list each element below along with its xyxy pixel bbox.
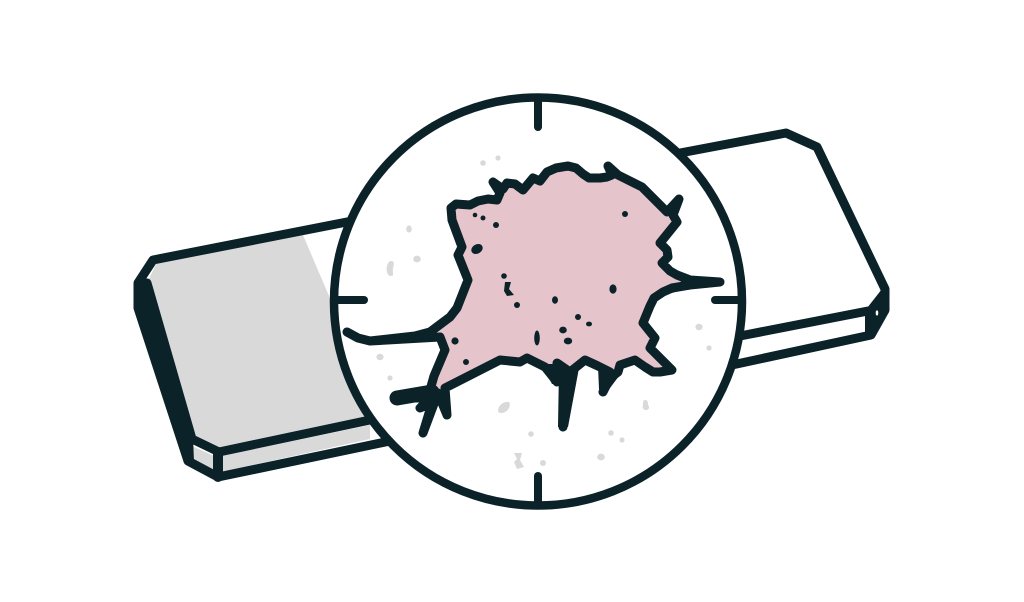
crosshair ticks [336, 98, 742, 505]
grey speckles [376, 155, 712, 469]
eraser: left worn grey end [134, 221, 390, 477]
magnifier lens [334, 98, 742, 506]
thick spike blob [397, 392, 432, 398]
eraser: right clean end [680, 133, 888, 365]
tapered spikes on stain [542, 271, 692, 427]
pink stain with spiky outline [347, 166, 720, 433]
dark specks on stain [451, 211, 628, 365]
